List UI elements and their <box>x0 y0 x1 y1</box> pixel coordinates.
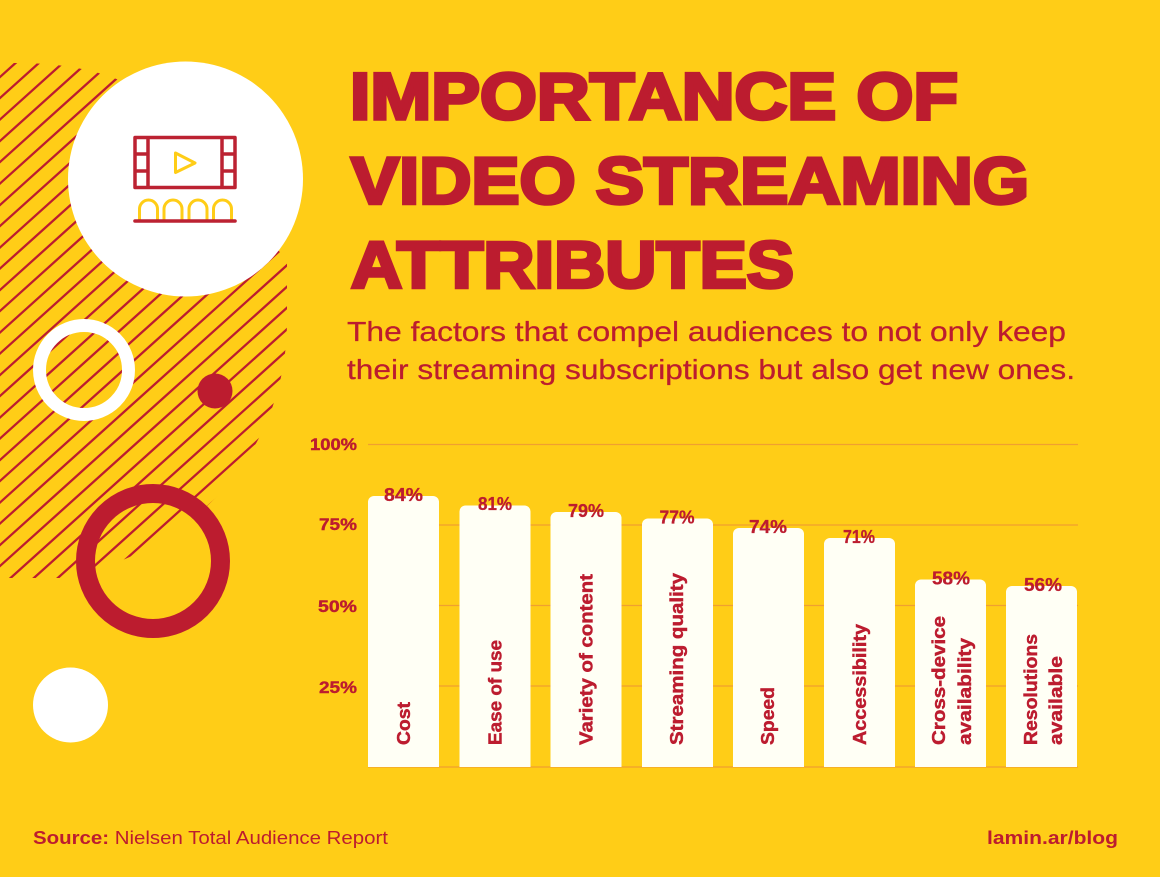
bar: Ease of use 81% <box>460 494 530 767</box>
bar: Variety of content 79%: Variety of content <box>576 574 596 745</box>
bar: Resolutions available 56% <box>1006 575 1077 767</box>
title: IMPORTANCE OF <box>350 59 958 133</box>
title <box>350 59 1029 302</box>
bar: Speed 74% <box>733 517 804 767</box>
film strip <box>135 138 235 188</box>
red dot <box>198 374 232 408</box>
bar: Ease of use 81%: Ease of use <box>484 640 506 745</box>
bar: Resolutions available 56%: 56% <box>1024 575 1062 595</box>
bar: Cost 84% <box>368 485 439 767</box>
white ring <box>40 326 128 414</box>
bar: Accessibility 71%: Accessibility <box>849 623 870 745</box>
bar: Variety of content 79%: 79% <box>568 501 604 521</box>
bar: Streaming quality 77% <box>642 508 713 767</box>
bar: Cross-device availability 58%: availability <box>954 637 975 745</box>
y axis labels: 100% <box>310 435 357 454</box>
title: VIDEO STREAMING <box>351 144 1029 218</box>
bar: Cost 84%: Cost <box>393 702 414 745</box>
subtitle <box>347 316 1075 385</box>
subtitle: The factors that compel audiences to not only keep <box>347 316 1066 347</box>
bar: Resolutions available 56%: Resolutions <box>1020 634 1041 745</box>
source note: Source: Nielsen Total Audience Report <box>33 827 388 848</box>
y axis labels: 25% <box>319 678 357 697</box>
white circle behind icon <box>68 62 303 296</box>
bar: Streaming quality 77%: Streaming quality <box>666 572 687 745</box>
bar chart <box>310 435 1078 767</box>
play triangle <box>176 153 195 172</box>
title: ATTRIBUTES <box>351 228 794 302</box>
white dot <box>33 668 108 742</box>
grid lines <box>368 444 1078 767</box>
seat baseline <box>135 219 235 223</box>
y axis labels: 50% <box>318 597 357 616</box>
bar: Accessibility 71% <box>824 527 895 767</box>
bar: Resolutions available 56%: available <box>1045 656 1066 745</box>
bar: Variety of content 79% <box>550 501 622 767</box>
icon: film strip and theatre seats <box>135 138 235 221</box>
theatre seats <box>140 200 232 220</box>
bar: Cross-device availability 58% <box>915 568 986 767</box>
striped decorative background shape <box>0 63 287 578</box>
bar: Accessibility 71%: 71% <box>843 527 875 547</box>
bar: Ease of use 81%: 81% <box>478 494 512 514</box>
bar: Cross-device availability 58%: Cross-device <box>928 616 949 745</box>
y axis labels: 75% <box>319 515 357 534</box>
y axis labels <box>310 435 357 697</box>
subtitle: their streaming subscriptions but also get new ones. <box>347 354 1075 385</box>
red ring <box>86 494 220 628</box>
bar: Speed 74%: 74% <box>749 517 787 537</box>
bar: Streaming quality 77%: 77% <box>660 508 694 528</box>
bar: Speed 74%: Speed <box>757 687 778 745</box>
bar: Cross-device availability 58%: 58% <box>932 568 970 588</box>
website link: lamin.ar/blog <box>987 827 1118 848</box>
bar: Cost 84%: 84% <box>384 485 423 505</box>
